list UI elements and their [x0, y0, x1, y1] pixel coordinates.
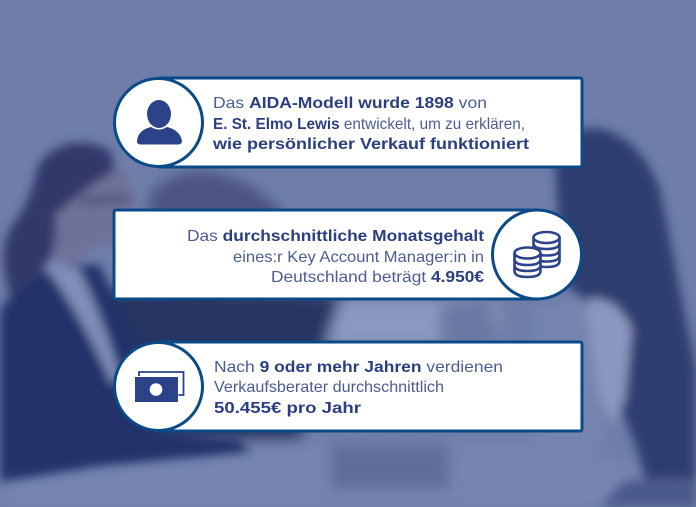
text: Monatsgehalt: Das durchschnittliche Monatsgehalt	[187, 228, 485, 245]
icon: banknotes	[114, 342, 202, 430]
icon: coins	[492, 210, 582, 299]
panel: AIDA-Modell	[114, 78, 582, 167]
icon: person	[114, 78, 202, 166]
text: AIDA-Modell	[212, 95, 530, 153]
text: Jahresverdienst: Verkaufsberater durchschnittlich	[214, 379, 444, 396]
text: Jahresverdienst: 50.455€ pro Jahr	[214, 400, 361, 417]
text: AIDA-Modell: Das AIDA-Modell wurde 1898 von	[213, 95, 487, 112]
text: Monatsgehalt	[187, 228, 485, 286]
text: Monatsgehalt: Deutschland beträgt 4.950€	[271, 269, 484, 286]
text: AIDA-Modell: E. St. Elmo Lewis entwickelt, um zu erklären,	[213, 116, 525, 133]
text: Monatsgehalt: eines:r Key Account Manager:in in	[233, 249, 484, 266]
card 1 box	[158, 78, 582, 167]
text: Jahresverdienst: Nach 9 oder mehr Jahren verdienen	[214, 359, 503, 376]
text: AIDA-Modell: wie persönlicher Verkauf funktioniert	[212, 136, 530, 153]
panel: Jahresverdienst	[114, 342, 582, 431]
panel: Monatsgehalt	[114, 210, 582, 299]
card 2 box	[114, 210, 538, 299]
text: Jahresverdienst	[214, 359, 503, 417]
card 3 box	[158, 342, 582, 431]
